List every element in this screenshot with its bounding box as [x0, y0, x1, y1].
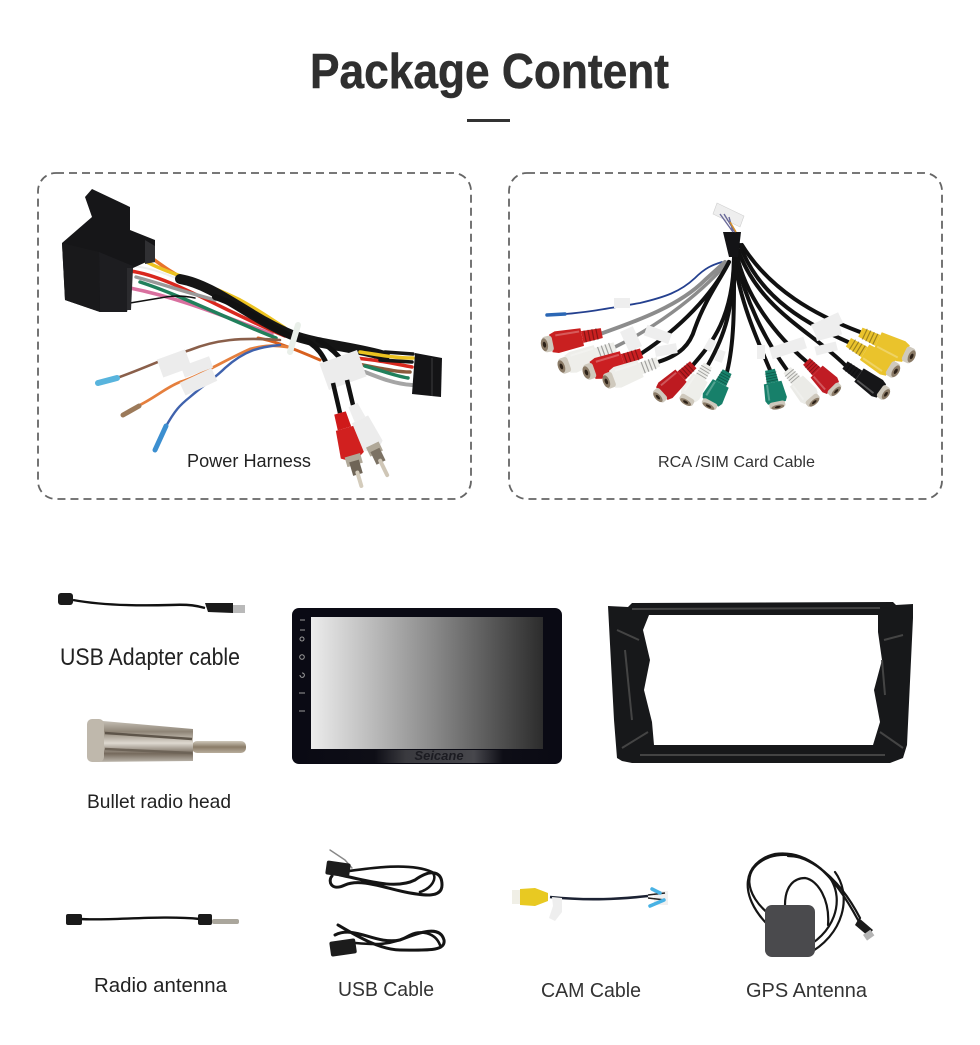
icon: rca cables male — [328, 380, 398, 491]
item: usb adapter cable — [58, 593, 245, 671]
frame highlights — [617, 608, 903, 755]
icon: cam cable — [512, 888, 668, 921]
item: mounting frame — [608, 602, 913, 763]
icon: harness main connector — [62, 189, 155, 312]
panel: rca sim cable — [509, 173, 942, 499]
item: bullet radio head — [87, 719, 246, 813]
label: gps antenna: GPS Antenna — [746, 980, 868, 1002]
label: usb cable: USB Cable — [338, 979, 434, 1001]
icon: gps antenna — [748, 853, 874, 957]
label: radio antenna: Radio antenna — [94, 975, 228, 997]
panel: power harness — [38, 173, 471, 499]
head unit side buttons — [299, 620, 305, 711]
item: radio antenna — [66, 914, 239, 997]
head unit brand: Seicane — [414, 748, 464, 763]
cable tie — [290, 325, 298, 352]
head unit bottom strip — [296, 750, 558, 763]
wire labels — [614, 298, 843, 363]
rca wires — [547, 245, 860, 372]
icon: usb adapter cable — [58, 593, 245, 613]
label: power harness: Power Harness — [187, 451, 311, 471]
item: head unit — [292, 608, 562, 764]
label: usb adapter cable: USB Adapter cable — [60, 644, 240, 671]
title underline — [467, 119, 510, 122]
label: rca sim card cable: RCA /SIM Card Cable — [658, 454, 815, 471]
icon: rca plugs — [539, 322, 919, 413]
item: cam cable — [512, 888, 668, 1002]
power harness wires — [130, 253, 413, 385]
item: usb cable — [325, 850, 444, 1001]
label: bullet radio head: Bullet radio head — [87, 791, 231, 813]
wire labels — [157, 349, 367, 396]
icon: harness right connector — [412, 353, 442, 397]
icon: bullet radio head — [87, 719, 246, 762]
icon: usb cable — [325, 850, 444, 957]
icon: rca top connector — [713, 203, 744, 257]
head unit screen — [311, 617, 543, 749]
title: Package Content — [310, 45, 669, 99]
icon: radio antenna — [66, 914, 239, 925]
item: gps antenna — [746, 853, 874, 1002]
icon: loose wires — [98, 339, 287, 450]
label: cam cable: CAM Cable — [541, 980, 641, 1002]
